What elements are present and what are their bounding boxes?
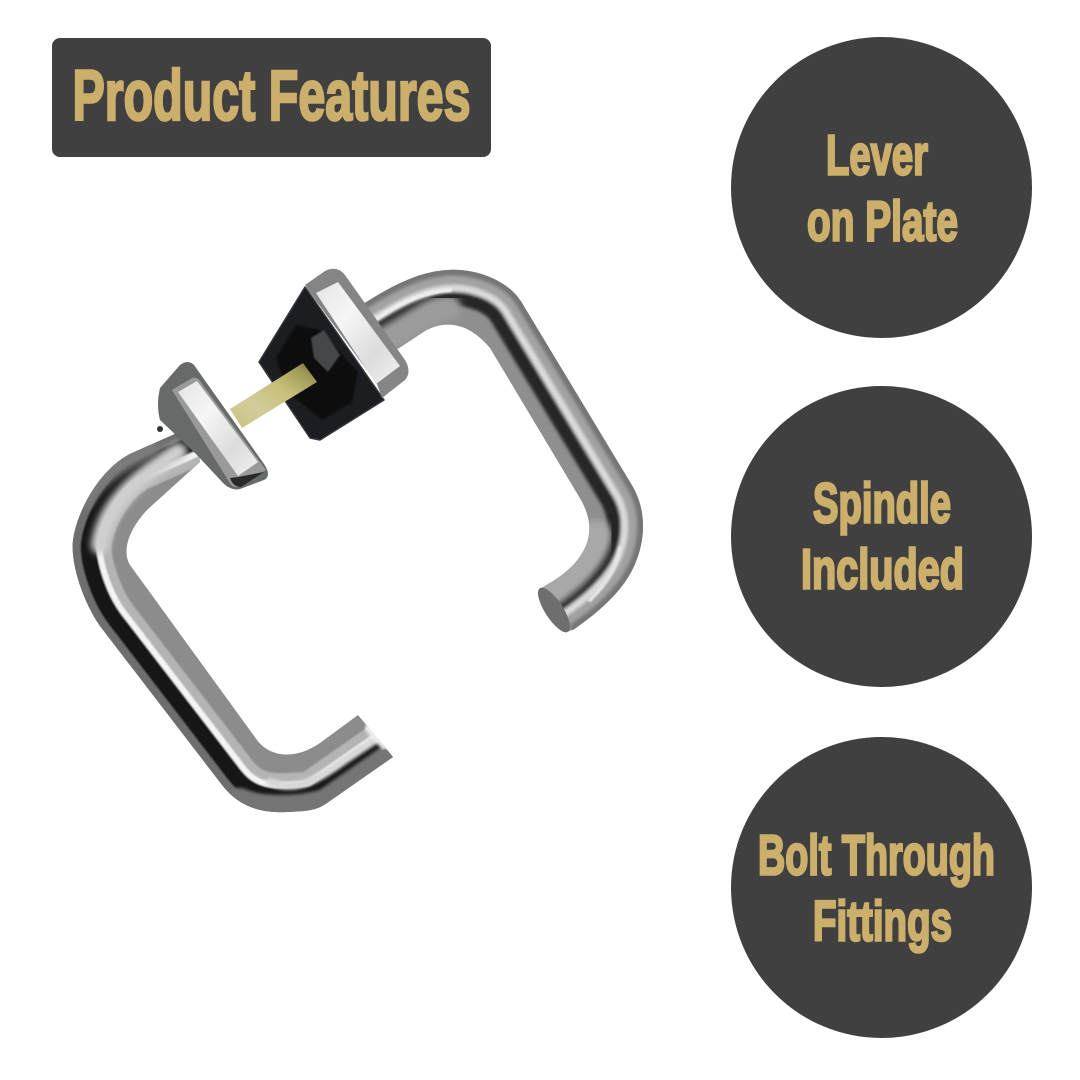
upper lever end shading — [550, 535, 597, 592]
title text: Product Features — [72, 57, 470, 136]
lower lever end highlight — [368, 728, 384, 746]
upper lever — [364, 270, 643, 632]
feature circle: lever on plate: on Plate — [807, 190, 958, 254]
right rosette back plate — [259, 287, 384, 440]
feature circle: bolt through fittings — [731, 737, 1032, 1038]
lower lever bottom-bend shading — [240, 757, 393, 810]
upper lever start shading — [385, 308, 448, 340]
right rosette chrome cover — [305, 269, 408, 398]
feature circle: spindle included: Included — [801, 538, 964, 602]
title badge — [52, 38, 491, 157]
right rosette recess detail — [276, 325, 358, 420]
feature circle: lever on plate: Lever — [826, 124, 928, 188]
screw — [157, 426, 163, 432]
left rosette — [157, 362, 268, 489]
feature circle: lever on plate — [731, 37, 1032, 338]
spindle — [230, 363, 317, 428]
door handle product illustration — [72, 268, 643, 812]
lower lever — [72, 434, 393, 812]
feature circle: bolt through fittings: Fittings — [813, 890, 952, 954]
feature circle: spindle included: Spindle — [813, 472, 951, 536]
upper lever end face — [532, 583, 576, 637]
lower lever upper-bend highlight — [100, 452, 178, 545]
feature circle: spindle included — [731, 386, 1032, 687]
